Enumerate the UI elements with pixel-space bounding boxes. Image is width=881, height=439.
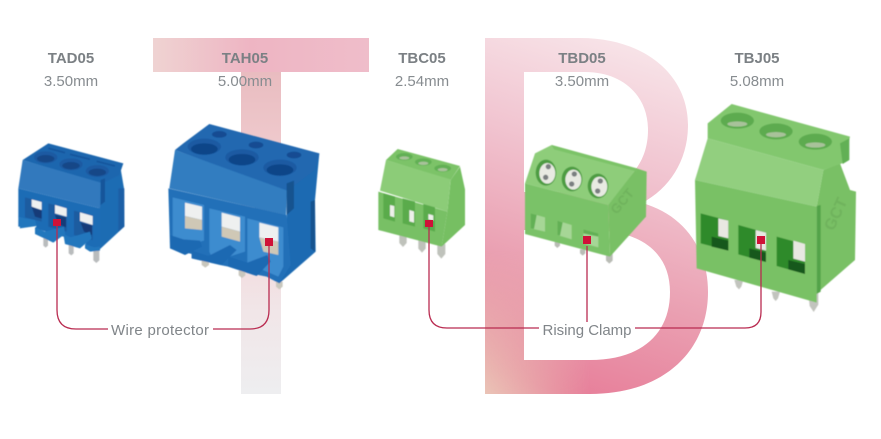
callout: Wire protector [53,219,273,339]
product heading: TAD05 [44,50,98,90]
product heading: TBC05: TBC05 [398,50,446,67]
product heading: TBJ05 [730,50,784,90]
product heading: TAD05: TAD05 [48,50,94,67]
product heading: TBJ05: TBJ05 [734,50,780,67]
product heading: TAH05: TAH05 [222,50,268,67]
product heading: TBD05: 3.50mm [555,73,609,90]
background letter B [485,38,708,394]
product heading: TAH05: 5.00mm [218,73,272,90]
callout: Rising Clamp: Rising Clamp [542,322,632,339]
connector: TBC05 green terminal block [378,149,465,259]
product heading: TBD05: TBD05 [558,50,606,67]
callout: Rising Clamp [425,220,765,339]
background letter T [153,38,369,394]
product heading: TBC05 [395,50,449,90]
connector: TAD05 blue terminal block [18,143,124,263]
callout: Wire protector: Wire protector [111,322,209,339]
connector: TBD05 green terminal block [525,145,647,264]
connector: TBD05 green terminal block: GCT [607,186,637,217]
product heading: TBD05 [555,50,609,90]
product heading: TAD05: 3.50mm [44,73,98,90]
product heading: TBJ05: 5.08mm [730,73,784,90]
connector: TAH05 blue terminal block [168,124,319,289]
product heading: TAH05 [218,50,272,90]
connector: TBJ05 green terminal block: GCT [822,195,851,233]
connector: TBJ05 green terminal block [695,104,856,312]
product heading: TBC05: 2.54mm [395,73,449,90]
